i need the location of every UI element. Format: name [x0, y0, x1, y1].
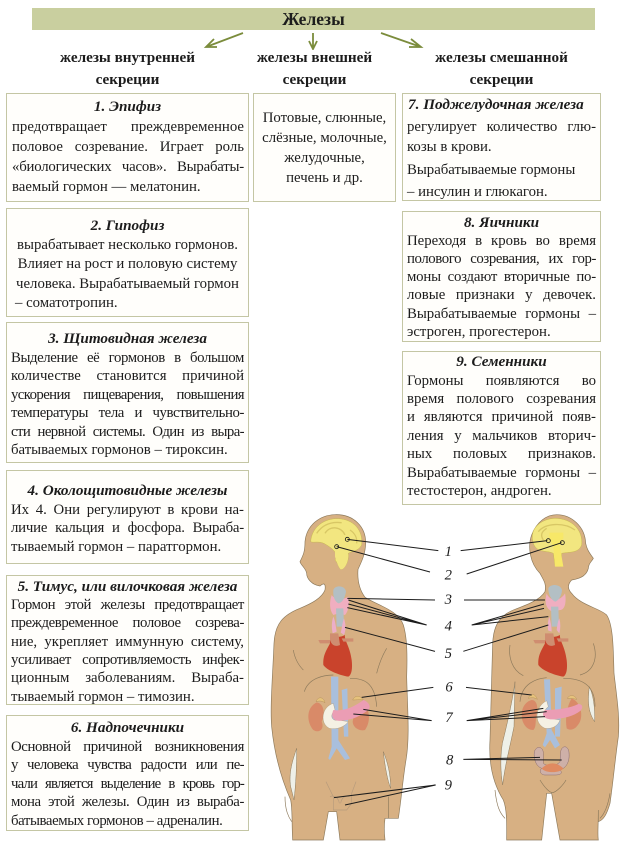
- panel: 3 thyroid gland: количестве становится причиной: [11, 368, 244, 384]
- panel: 8 ovaries: ловые признаки у девочек.: [407, 287, 596, 303]
- female larynx and thyroid: [546, 593, 566, 612]
- title bar: Железы: [282, 9, 345, 29]
- panel: 9 testes: Вырабатываемые гормоны –: [407, 464, 596, 480]
- callout numbers: 2: [445, 567, 452, 583]
- panel: exocrine glands list: [253, 93, 396, 202]
- panel: 1 pineal gland: 1. Эпифиз: [94, 98, 161, 115]
- column heading: exocrine glands: [256, 49, 372, 88]
- panel: 3 thyroid gland: ускорения пищеварения, повышения: [11, 386, 244, 402]
- panel: 5 thymus: преждевременное половое созрева-: [11, 614, 244, 630]
- panel: 2 pituitary gland: Влияет на рост и половую систему: [18, 256, 237, 272]
- panel: 5 thymus: ционным заболеваниям. Выраба-: [11, 670, 244, 686]
- panel: 5 thymus: ние, укрепляет иммунную систему,: [11, 634, 244, 650]
- callout numbers: [444, 544, 454, 793]
- panel: 7 pancreas: Вырабатываемые гормоны: [407, 162, 575, 178]
- male adrenals: [316, 696, 363, 703]
- column heading: endocrine glands: [60, 49, 195, 88]
- panel: 6 adrenal glands: Основной причиной возникновения: [11, 738, 244, 754]
- panel: 4 parathyroid glands: Их 4. Они регулируют в крови на-: [11, 502, 244, 518]
- panel: 9 testes: 9. Семенники: [456, 352, 547, 370]
- male pancreas: [332, 700, 370, 721]
- panel: 5 thymus: тываемый гормон – тимозин.: [11, 688, 195, 704]
- panel: 4 parathyroid glands: [6, 470, 249, 564]
- column heading: exocrine glands: секреции: [283, 71, 346, 88]
- column heading: mixed glands: секреции: [470, 71, 533, 88]
- panel: exocrine glands list: печень и др.: [286, 170, 363, 186]
- panel: 6 adrenal glands: [6, 715, 249, 831]
- title bar: [32, 8, 595, 30]
- male torso lines: [285, 648, 388, 822]
- column heading: endocrine glands: железы внутренней: [60, 49, 195, 66]
- panel: 7 pancreas: – инсулин и глюкагон.: [407, 184, 548, 200]
- panel: 9 testes: время полового созревания: [407, 390, 596, 406]
- panel: 5 thymus: Гормон этой железы предотвращает: [11, 596, 244, 612]
- panel: 7 pancreas: козы в крови.: [407, 139, 492, 155]
- panel: 6 adrenal glands: чали является выделение в кровь гор-: [11, 776, 244, 792]
- female pancreas: [543, 704, 582, 719]
- panel: 3 thyroid gland: 3. Щитовидная железа: [48, 330, 207, 346]
- male figure: [271, 515, 408, 840]
- panel: 3 thyroid gland: батываемых гормонов – тироксин.: [11, 442, 228, 458]
- panel: 9 testes: и являются причиной появ-: [407, 408, 596, 424]
- panel: 1 pineal gland: [6, 93, 249, 202]
- female thymus: [548, 617, 560, 633]
- panel: 8 ovaries: полового созревания, их гор-: [407, 251, 596, 267]
- panel: 4 parathyroid glands: тываемый гормон – паратгормон.: [11, 538, 221, 554]
- panel: 9 testes: ных половых признаков.: [407, 446, 596, 462]
- female body lines: [495, 643, 610, 818]
- male duodenum: [323, 703, 348, 729]
- panel: 3 thyroid gland: [6, 322, 249, 463]
- female brain: [532, 518, 582, 567]
- panel: exocrine glands list: Потовые, слюнные,: [263, 110, 386, 126]
- panel: 7 pancreas: регулирует количество глю-: [407, 119, 596, 135]
- panel: 9 testes: тестостерон, андроген.: [407, 482, 552, 498]
- male testes: [326, 782, 356, 810]
- female heart: [538, 635, 567, 677]
- panel: 7 pancreas: [402, 93, 601, 201]
- male brain: [311, 519, 362, 569]
- male kidneys: [308, 702, 369, 731]
- female figure: [490, 515, 619, 840]
- panel: 9 testes: [402, 351, 601, 505]
- panel: 5 thymus: [6, 575, 249, 705]
- column heading: mixed glands: [435, 49, 568, 88]
- column heading: exocrine glands: железы внешней: [257, 49, 372, 66]
- panel: 3 thyroid gland: Выделение её гормонов в большом: [11, 350, 244, 366]
- anatomy diagram: [270, 514, 620, 840]
- panel: 2 pituitary gland: 2. Гипофиз: [91, 217, 164, 234]
- arrows from title to the three categories: [204, 32, 424, 50]
- panel: 7 pancreas: 7. Поджелудочная железа: [408, 96, 584, 112]
- panel: 2 pituitary gland: – соматотропин.: [15, 295, 118, 311]
- panel: 1 pineal gland: предотвращает преждевременное: [12, 119, 244, 135]
- panel: 5 thymus: усиливает сопротивляемость инфек-: [11, 652, 244, 668]
- female waist gaps: [501, 682, 595, 785]
- panel: 2 pituitary gland: человека. Вырабатываемый гормон: [16, 276, 239, 292]
- panel: 1 pineal gland: половое созревание. Играет роль: [12, 139, 244, 155]
- male heart: [323, 635, 352, 677]
- panel: 1 pineal gland: «биологических часов». Вырабаты-: [12, 159, 244, 175]
- male vessels: [328, 677, 350, 760]
- panel: exocrine glands list: желудочные,: [284, 150, 365, 166]
- panel: 4 parathyroid glands: 4. Околощитовидные железы: [28, 482, 227, 498]
- column heading: endocrine glands: секреции: [96, 71, 159, 88]
- female duodenum: [537, 701, 560, 728]
- panel: 8 ovaries: [402, 211, 601, 342]
- panel: 6 adrenal glands: батываемых гормонов – адреналин.: [11, 812, 222, 828]
- callout numbers: 3: [444, 592, 452, 608]
- callout numbers: 1: [445, 544, 452, 560]
- callout numbers: 9: [445, 777, 453, 793]
- panel: 9 testes: ления у мальчиков вторич-: [407, 428, 596, 444]
- panel: 2 pituitary gland: [6, 208, 249, 317]
- female kidneys: [522, 698, 581, 730]
- callout numbers: 5: [445, 646, 452, 662]
- male larynx and thyroid: [330, 595, 349, 615]
- panel: 3 thyroid gland: сти нервной системы. Один из выра-: [11, 424, 244, 440]
- panel: 9 testes: Гормоны появляются во: [407, 372, 596, 388]
- panel: 6 adrenal glands: 6. Надпочечники: [71, 718, 184, 736]
- column heading: mixed glands: железы смешанной: [435, 49, 568, 66]
- panel: 1 pineal gland: ваемый гормон — мелатонин.: [12, 179, 201, 195]
- female adrenals: [528, 694, 577, 699]
- callout numbers: 4: [445, 619, 452, 635]
- female body: [490, 515, 619, 840]
- panel: 4 parathyroid glands: личие кальция и фосфора. Выраба-: [11, 520, 244, 536]
- panel: 8 ovaries: Переходя в кровь во время: [407, 233, 596, 249]
- panel: 5 thymus: 5. Тимус, или вилочковая железа: [18, 578, 237, 594]
- male thymus: [332, 617, 346, 635]
- callout numbers: 6: [445, 679, 453, 695]
- callout lines: [334, 537, 564, 805]
- panel: 8 ovaries: 8. Яичники: [464, 214, 539, 231]
- panel: 8 ovaries: Вырабатываемые гормоны –: [407, 306, 596, 322]
- panel: 6 adrenal glands: мона этой железы. Один из выраба-: [11, 794, 244, 810]
- panel: 3 thyroid gland: температуры тела и чувствительно-: [11, 404, 244, 420]
- panel: 8 ovaries: эстроген, прогестерон.: [407, 324, 551, 340]
- male arm gaps: [290, 748, 391, 800]
- callout numbers: 7: [445, 710, 453, 726]
- female uterus and ovaries: [534, 747, 569, 775]
- panel: exocrine glands list: слёзные, молочные,: [262, 130, 387, 146]
- panel: 2 pituitary gland: вырабатывает несколько гормонов.: [17, 237, 238, 253]
- female vessels: [543, 679, 562, 748]
- panel: 6 adrenal glands: у человека чувства радости или пе-: [11, 756, 244, 772]
- callout numbers: 8: [446, 753, 454, 769]
- male body: [271, 515, 408, 840]
- panel: 8 ovaries: моны создают вторичные по-: [407, 269, 596, 285]
